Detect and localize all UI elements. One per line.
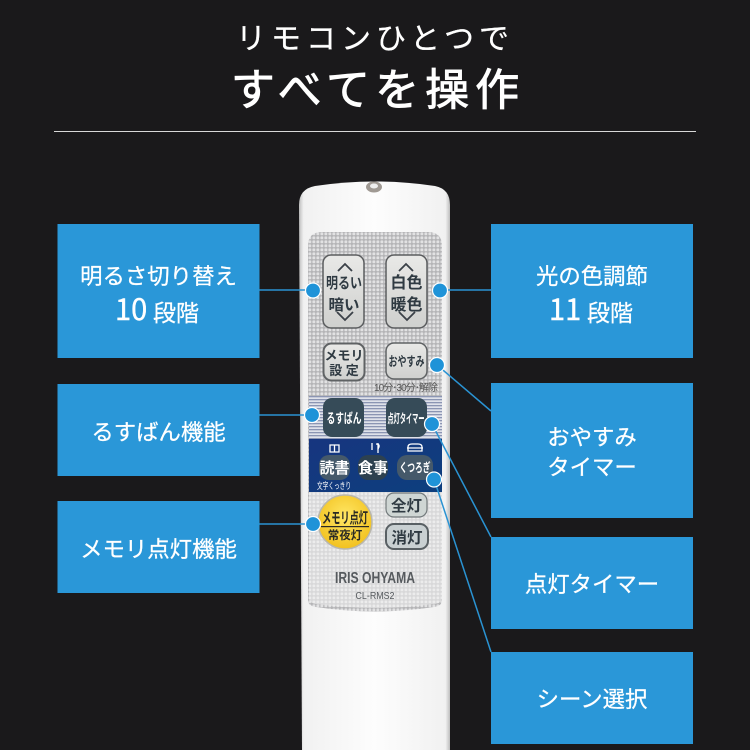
title: [231, 23, 525, 115]
panel: on timer: [491, 537, 693, 629]
sleep timer button: [386, 343, 427, 379]
panel: light colour adjust: [491, 224, 693, 358]
panel: away mode: [58, 384, 260, 476]
memory setting button: [324, 344, 364, 380]
memory light button: [318, 495, 372, 549]
memory light button: 常夜灯: [328, 528, 363, 542]
memory setting button: メモリ: [324, 348, 364, 363]
panel: brightness switching: 段階: [153, 300, 199, 326]
panel: brightness switching: 10: [115, 287, 147, 329]
panel: brightness switching: 明るさ切り替え: [80, 264, 237, 289]
memory setting button: 設 定: [329, 363, 359, 378]
timer label: 10分･30分･解除: [374, 381, 438, 394]
panel: memory lighting: [58, 501, 260, 593]
panel: sleep timer: [491, 383, 693, 518]
on timer button: 点灯タイマー: [388, 411, 424, 426]
relax button: くつろぎ: [400, 460, 431, 475]
title: リモコンひとつで: [236, 23, 514, 56]
panel: away mode: るすばん機能: [91, 420, 226, 445]
panel: memory lighting: メモリ点灯機能: [80, 537, 237, 562]
brightness button: [323, 255, 364, 328]
panel: brightness switching: [58, 224, 260, 358]
blue scene band: [309, 439, 442, 492]
silver control panel: [308, 232, 442, 612]
infrared window: [366, 182, 382, 192]
sleep timer button: おやすみ: [388, 354, 424, 369]
off button: 消灯: [391, 529, 423, 547]
title: すべてを操作: [231, 66, 525, 115]
panel: light colour adjust: 11: [549, 287, 581, 329]
panel: scene selection: シーン選択: [537, 687, 647, 712]
brightness button: 暗い: [328, 297, 360, 314]
off button: [386, 524, 428, 549]
marker dots: [304, 283, 448, 532]
reading button: 読書: [319, 459, 350, 477]
striped band: [309, 396, 442, 439]
on timer button: [386, 398, 427, 437]
scene icons: [330, 443, 423, 453]
connector lines: [259, 290, 491, 652]
reading button: [319, 455, 350, 480]
panel: light colour adjust: 光の色調節: [536, 264, 648, 289]
remote control: [299, 182, 450, 750]
colour button: [386, 255, 427, 328]
brightness button: 明るい: [326, 275, 362, 292]
panel: on timer: 点灯タイマー: [525, 572, 659, 597]
panel: scene selection: [491, 652, 693, 744]
colour button: 暖色: [390, 295, 423, 314]
memory light button: メモリ点灯: [322, 509, 368, 527]
panel: sleep timer: タイマー: [547, 455, 637, 480]
panel: light colour adjust: 段階: [587, 300, 633, 326]
all on button: [386, 493, 427, 517]
meal button: [358, 455, 388, 480]
remote body: [299, 182, 450, 750]
brand logo: IRIS OHYAMA: [335, 570, 415, 587]
all on button: 全灯: [391, 496, 422, 515]
away mode button: [323, 398, 364, 437]
away mode button: るすばん: [326, 411, 362, 426]
meal button: 食事: [358, 459, 388, 477]
colour button: 白色: [390, 273, 423, 292]
crisp text label: 文字くっきり: [317, 480, 351, 491]
relax button: [397, 455, 433, 480]
model number: CL-RMS2: [356, 591, 395, 602]
panel: sleep timer: おやすみ: [547, 425, 637, 450]
